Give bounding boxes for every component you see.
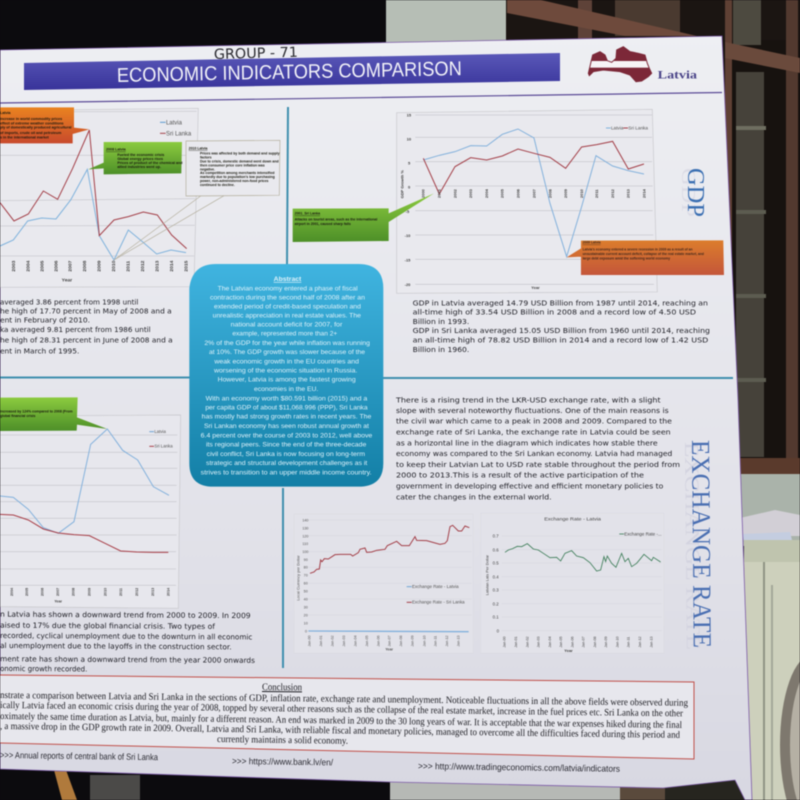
chart: exchange rate Latvia: Jan-06 — [570, 636, 574, 648]
panel: abstract: worsening of the economic situation in Russia. — [213, 368, 357, 375]
panel: abstract: 6.4 percent over the course of 2003 to 2012, well above — [201, 432, 373, 439]
chart: exchange rate Latvia vs Sri Lanka: 140 — [302, 518, 308, 522]
chart: exchange rate Latvia vs Sri Lanka: 20 — [304, 613, 308, 617]
chart: exchange rate Latvia vs Sri Lanka: Jan-03 — [342, 635, 346, 647]
exchange rate vertical heading: EXCHANGE RATE — [686, 440, 717, 648]
unemployment description text: n Latvia has shown a downward trend from 2000 to 2009. In 2009 — [0, 610, 251, 620]
panel: abstract: The Latvian economy entered a phase of fiscal — [218, 285, 358, 292]
unemployment line chart: 2013 — [151, 588, 155, 596]
callout: inflation 2010 note: negative. — [200, 167, 215, 171]
callout: inflation orange: ply of domestically produced agricultural — [0, 126, 72, 130]
GDP line chart: 2000 — [421, 188, 426, 198]
callout: inflation orange: Latvia — [0, 111, 12, 115]
inflation line chart: Latvia — [166, 120, 183, 126]
callout: GDP green 2001: Attacks on tourist areas, such as the international — [295, 217, 377, 221]
GDP line chart: Sri Lanka — [628, 125, 648, 130]
panel: abstract: Sri Lankan economy has seen robust annual growth at — [204, 423, 369, 430]
GDP line chart: 2014 — [641, 188, 646, 198]
exchange rate description text: economy was compared to the Sri Lankan economy. Latvia had managed — [396, 449, 672, 458]
GDP description text: all-time high of 33.54 USD Billion in 2008 and a record low of 4.50 USD — [413, 308, 696, 317]
panel: abstract: extended period of credit-based speculation and — [214, 303, 361, 310]
callout: inflation orange: effect of extreme weather conditions — [0, 121, 64, 125]
unemployment line chart: 2004 — [10, 587, 14, 596]
GDP line chart: -10 — [405, 233, 411, 238]
title banner: ECONOMIC INDICATORS COMPARISON — [117, 58, 462, 87]
chart: exchange rate Latvia vs Sri Lanka: Exchange Rate - Sri Lanka — [412, 600, 465, 605]
chart: exchange rate Latvia: 0.2 — [493, 601, 499, 606]
panel: conclusion: , a massive drop in the GDP growth rate in 2009. Overall, Latvia and Sri Lanka, with reliable fiscal and monetary policies, managed to overcome all the difficulties faced during this period and — [0, 721, 680, 741]
references: >>> https://www.bank.lv/en/ — [232, 756, 334, 767]
title banner — [24, 53, 560, 90]
inflation description text: he high of 28.31 percent in June of 2008 and a — [0, 335, 173, 344]
callout: inflation green 2008: 2008 Latvia — [106, 148, 127, 152]
GDP line chart: 2001 — [437, 188, 442, 198]
Latvia map logo — [587, 46, 698, 83]
unemployment description text: aised to 17% due the global financial crisis. Two types of — [0, 621, 215, 631]
inflation line chart: 2011 — [125, 261, 131, 272]
exchange rate description text: slope with several noteworthy fluctuations. One of the main reasons is — [396, 406, 669, 415]
GDP line chart: GDP Growth % — [399, 170, 404, 198]
callout: GDP green 2001 — [293, 193, 434, 242]
unemployment description text: onomic growth recorded. — [0, 664, 87, 674]
panel: conclusion: currently maintains a solid economy. — [217, 734, 348, 747]
chart: exchange rate Latvia: Jan-04 — [548, 636, 552, 648]
unemployment line chart: 2009 — [88, 588, 92, 596]
unemployment line chart: 2014 — [167, 587, 171, 596]
callout: inflation orange: increase in world commodity prices — [0, 117, 62, 121]
unemployment line chart: 2006 — [41, 588, 45, 596]
chart: exchange rate Latvia vs Sri Lanka — [294, 514, 473, 653]
inflation line chart: 2013 — [154, 260, 160, 272]
panel: abstract: contraction during the second half of 2008 after an — [210, 294, 365, 301]
GDP description text: Billion in 1993. — [413, 317, 469, 326]
panel: unemployment — [0, 397, 255, 674]
inflation description text: ent in March of 1995. — [0, 346, 79, 355]
chart: exchange rate Latvia: Jan-02 — [526, 636, 530, 648]
inflation line chart: 2004 — [25, 260, 31, 272]
chart: exchange rate Latvia vs Sri Lanka: Jan-09 — [410, 635, 414, 647]
panel: abstract: 2% of the GDP for the year while inflation was running — [204, 340, 370, 347]
chart: exchange rate Latvia: Jan-08 — [593, 636, 597, 648]
callout: inflation 2010 note: 2010 Latvia — [189, 146, 207, 150]
panel: abstract — [189, 264, 383, 487]
chart: exchange rate Latvia: Jan-11 — [627, 637, 631, 648]
GDP description text: GDP in Sri Lanka averaged 15.05 USD Billion from 1960 until 2014, reaching — [413, 326, 710, 335]
background: wall, papers and air conditioner — [738, 474, 800, 800]
GDP line chart: 2005 — [500, 188, 505, 198]
panel: abstract: per capita GDP of about $11,068.996 (PPP), Sri Lanka — [205, 405, 368, 412]
inflation line chart: 2012 — [140, 260, 146, 272]
exchange rate description text: cater the changes in the external world. — [396, 493, 552, 502]
chart: exchange rate Latvia: Exchange Rate - Latvia — [544, 516, 601, 522]
panel: conclusion: Conclusion — [262, 682, 302, 693]
callout: inflation 2010 note: As competition among merchants intensified — [200, 171, 275, 175]
GDP line chart: -15 — [405, 257, 411, 262]
chart: exchange rate Latvia vs Sri Lanka: 120 — [302, 534, 308, 538]
exchange rate description text: the civil war which came to a peak in 2008 and 2009. Compared to the — [396, 417, 672, 426]
exchange rate description text: government in developing effective and efficient monetary policies to — [396, 482, 664, 491]
inflation line chart: 2008 — [82, 260, 88, 272]
panel: abstract: weak economic growth in the EU countries and — [213, 358, 359, 365]
unemployment description text: recorded, cyclical unemployment due to the downturn in all economic — [0, 631, 252, 642]
chart: exchange rate Latvia vs Sri Lanka: Jan-13 — [457, 635, 461, 647]
panel: abstract: strives to transition to an upper middle income country. — [201, 469, 372, 476]
chart: exchange rate Latvia vs Sri Lanka: 100 — [302, 550, 308, 554]
callout: inflation orange: s in the international market — [0, 135, 50, 139]
unemployment line chart: Year — [54, 600, 63, 604]
GDP line chart: Year — [531, 285, 540, 290]
chart: exchange rate Latvia vs Sri Lanka: 90 — [304, 558, 308, 562]
GDP line chart: -20 — [405, 282, 411, 287]
chart: exchange rate Latvia vs Sri Lanka: 50 — [304, 590, 308, 594]
unemployment line chart: Sri Lanka — [154, 444, 173, 449]
chart: exchange rate Latvia vs Sri Lanka: Jan-05 — [365, 635, 369, 647]
chart: exchange rate Latvia: Jan-03 — [537, 636, 541, 648]
inflation line chart — [0, 108, 198, 287]
panel: abstract: Abstract — [274, 276, 302, 283]
unemployment line chart: 2012 — [135, 588, 139, 596]
callout: GDP orange 2009: 2009 Latvia — [583, 241, 601, 245]
chart: exchange rate Latvia: Latvian Lats Per Dollar — [484, 554, 489, 595]
background: lower room — [54, 770, 745, 800]
chart: exchange rate Latvia: Jan-10 — [615, 636, 619, 648]
callout: inflation 2010 note: Due to crisis, domestic demand went down and — [200, 159, 279, 163]
Latvia map logo: Latvia — [658, 70, 697, 82]
callout: inflation green 2008: Prices of product of the chemical and — [117, 161, 183, 165]
callout: GDP green 2001: 2001_Sri Lanka — [295, 212, 320, 216]
callout: inflation 2010 note: factors — [200, 155, 212, 159]
chart: exchange rate Latvia vs Sri Lanka: 130 — [302, 526, 308, 530]
callout: inflation green 2008: allied industries went up. — [117, 165, 161, 169]
GDP line chart — [397, 109, 657, 293]
panel: conclusion: ically Latvia faced an economic crisis during the year of 2008, topped by several other reasons such as the collapse of the real estate market, increase in the fuel prices etc. Sri Lanka on the other — [0, 700, 684, 719]
chart: exchange rate Latvia vs Sri Lanka: 0 — [305, 629, 307, 633]
chart: exchange rate Latvia vs Sri Lanka: 110 — [302, 542, 308, 546]
GDP line chart: -5 — [406, 209, 410, 214]
section dividers — [0, 107, 733, 668]
GDP line chart: 5 — [408, 160, 411, 165]
GDP line chart: 2002 — [452, 188, 457, 198]
panel: abstract: at 10%. The GDP growth was slower because of the — [209, 349, 365, 356]
inflation line chart: 2009 — [97, 260, 103, 272]
panel: conclusion: oximately the same time duration as Latvia, but, mainly for a different reason. An end was marked in 2009 to the 30 long years of war. It is acceptable that the war expenses hiked during the final — [0, 711, 682, 731]
chart: exchange rate Latvia: Exchange Rate -... — [624, 531, 662, 536]
GDP line chart: 2007 — [531, 188, 536, 198]
inflation description text: he high of 17.70 percent in May of 2008 and a — [0, 306, 172, 315]
callout: GDP green 2001: airport in 2001, caused sharp falls — [295, 222, 351, 226]
background: wooden window frames — [506, 0, 800, 474]
chart: exchange rate Latvia: Jan-01 — [514, 636, 518, 648]
exchange rate description text: as a horizontal line in the diagram which indicates how stable there — [396, 438, 658, 447]
exchange rate vertical heading: EXCHANGE RATE — [680, 442, 704, 650]
callout: inflation 2010 note: then consumer price core inflation was — [200, 163, 265, 167]
chart: exchange rate Latvia vs Sri Lanka: 60 — [304, 582, 308, 586]
panel: conclusion — [0, 675, 694, 759]
callout: inflation 2010 note: markedly due to population's low purchasing — [200, 175, 275, 179]
panel: GDP — [293, 109, 724, 354]
inflation line chart: Sri Lanka — [166, 131, 192, 137]
callout: inflation orange — [0, 107, 89, 143]
chart: exchange rate Latvia vs Sri Lanka: 80 — [304, 566, 308, 570]
chart: exchange rate Latvia vs Sri Lanka: Jan-10 — [422, 635, 426, 647]
callout: GDP orange 2009 — [567, 240, 724, 275]
GDP line chart: 2013 — [626, 188, 631, 198]
exchange rate description text: There is a rising trend in the LKR-USD exchange rate, with a slight — [395, 395, 661, 404]
inflation line chart: 2010 — [111, 260, 117, 272]
references: >>> http://www.tradingeconomics.com/latvia/indicators — [418, 761, 621, 774]
chart: exchange rate Latvia vs Sri Lanka: 70 — [304, 574, 308, 578]
GDP line chart: 0 — [408, 185, 411, 190]
exchange rate description text — [395, 395, 680, 502]
chart: exchange rate Latvia: Jan-05 — [559, 636, 563, 648]
GDP vertical heading: GDP — [677, 168, 699, 217]
callout: inflation green 2008: Fueled the economic crisis — [117, 153, 164, 157]
chart: exchange rate Latvia: 0.6 — [493, 547, 499, 552]
panel: abstract: national account deficit for 2007, for — [231, 322, 343, 329]
callout: inflation 2010 note: continued to decline. — [200, 183, 235, 187]
inflation line chart: 2015 — [184, 260, 190, 272]
unemployment line chart: 2011 — [119, 588, 123, 596]
exchange rate description text: to keep their Latvian Lat to USD rate stable throughout the period from — [396, 460, 680, 469]
chart: exchange rate Latvia vs Sri Lanka: Jan-12 — [445, 635, 449, 647]
chart: exchange rate Latvia: 0.1 — [493, 615, 499, 620]
inflation line chart: 2007 — [68, 260, 74, 272]
GDP description text: an all-time high of 78.82 USD Billion in 2014 and a record low of 1.42 USD — [413, 336, 709, 345]
references: >>> Annual reports of central bank of Sri Lanka — [0, 750, 158, 762]
GDP line chart: 2009 — [563, 188, 568, 198]
chart: exchange rate Latvia: Jan-13 — [649, 636, 653, 648]
GDP line chart: 2004 — [484, 188, 489, 198]
chart: exchange rate Latvia vs Sri Lanka: Jan-04 — [353, 635, 357, 647]
references — [0, 750, 621, 774]
chart: exchange rate Latvia vs Sri Lanka: 10 — [304, 621, 308, 625]
callout: GDP orange 2009: large debt exposure amid the softening world economy — [583, 257, 670, 261]
unemployment description text — [0, 610, 255, 674]
GDP line chart: 15 — [407, 113, 412, 118]
chart: exchange rate Latvia vs Sri Lanka: Jan-02 — [331, 635, 335, 647]
GDP line chart: 2006 — [515, 188, 520, 198]
chart: exchange rate Latvia vs Sri Lanka: Jan-06 — [376, 635, 380, 647]
callout: inflation orange: of imports, crude oil and petroleum — [0, 131, 62, 135]
panel: abstract: With an economy worth $80.591 billion (2015) and a — [206, 395, 368, 402]
callout: inflation 2010 note: power, non-administered non-food prices — [200, 179, 269, 183]
callout: unemployment green: global financial crisis — [0, 414, 35, 418]
GDP vertical heading: GDP — [682, 168, 708, 217]
unemployment description text: ment rate has shown a downward trend from the year 2000 onwards — [0, 654, 255, 665]
panel: abstract: has mostly had strong growth rates in recent years. The — [202, 414, 372, 421]
chart: exchange rate Latvia: 0.5 — [493, 561, 499, 566]
unemployment line chart: 2010 — [103, 588, 107, 596]
chart: exchange rate Latvia vs Sri Lanka: Exchange Rate - Latvia — [412, 584, 459, 589]
chart: exchange rate Latvia: Year — [564, 648, 573, 653]
chart: exchange rate Latvia vs Sri Lanka: Jan-07 — [388, 635, 392, 647]
chart: exchange rate Latvia vs Sri Lanka: Jan-01 — [319, 635, 323, 647]
inflation line chart: Year — [62, 278, 72, 284]
chart: exchange rate Latvia vs Sri Lanka: Year — [385, 647, 394, 651]
panel: abstract: civil conflict, Sri Lanka is now focusing on long-term — [207, 451, 365, 458]
callout: unemployment green: increased by 124% compared to 2008 (From — [0, 409, 73, 413]
panel: abstract: example, represented more than 2+ — [232, 331, 337, 338]
panel: exchange rate charts — [294, 513, 664, 653]
handwritten group label: GROUP - 71 — [214, 45, 298, 63]
inflation line chart: 2003 — [11, 260, 17, 272]
GDP line chart: 2012 — [610, 188, 615, 198]
callout: inflation 2010 note — [114, 140, 280, 260]
callout: GDP orange 2009: unsustainable current account deficit, collapse of the real estate market, and — [583, 252, 704, 256]
callout: inflation green 2008 — [88, 142, 183, 174]
chart: exchange rate Latvia vs Sri Lanka: Jan-11 — [434, 636, 438, 647]
GDP line chart: 10 — [407, 137, 412, 142]
chart: exchange rate Latvia: Jan-07 — [582, 636, 586, 648]
panel: abstract: However, Latvia is among the fastest growing — [218, 377, 356, 384]
chart: exchange rate Latvia: Jan-00 — [503, 636, 507, 648]
chart: exchange rate Latvia: 0.7 — [493, 534, 499, 539]
GDP line chart: 2003 — [468, 188, 473, 198]
inflation description text — [0, 297, 173, 355]
chart: exchange rate Latvia vs Sri Lanka: Jan-08 — [399, 635, 403, 647]
GDP line chart: 2011 — [594, 189, 599, 198]
inflation line chart: 2006 — [53, 260, 59, 272]
chart: exchange rate Latvia vs Sri Lanka: Jan-00 — [308, 635, 312, 647]
panel: conclusion: nstrate a comparison between Latvia and Sri Lanka in the sections of GDP, inflation rate, exchange rate and unemployment. Noticeable fluctuations in all the above fields were observed during — [0, 690, 688, 709]
panel: abstract: its regional peers. Since the end of the three-decade — [206, 442, 367, 449]
chart: exchange rate Latvia: 0.3 — [493, 588, 499, 593]
GDP line chart: 2010 — [579, 188, 584, 198]
inflation description text: averaged 3.86 percent from 1998 until — [0, 297, 138, 306]
callout: unemployment green — [0, 397, 107, 431]
panel: abstract: economies in the EU. — [254, 386, 318, 393]
callout: inflation 2010 note: Prices was affected by both demand and supply — [200, 151, 280, 155]
unemployment line chart: Latvia — [154, 429, 166, 434]
chart: exchange rate Latvia vs Sri Lanka: 40 — [304, 598, 308, 602]
background: pillar — [386, 0, 506, 45]
unemployment line chart: 2008 — [72, 588, 76, 596]
GDP line chart: 2008 — [547, 188, 552, 198]
panel: abstract: unrealistic appreciation in real estate values. The — [213, 312, 361, 319]
panel: abstract: strategic and structural development challenges as it — [206, 460, 367, 467]
GDP description text: GDP in Latvia averaged 14.79 USD Billion from 1987 until 2014, reaching an — [413, 298, 708, 307]
header divider — [0, 92, 722, 103]
GDP description text — [413, 298, 710, 354]
unemployment line chart: 2007 — [56, 588, 60, 596]
GDP description text: Billion in 1960. — [413, 345, 469, 354]
chart: exchange rate Latvia vs Sri Lanka: Local Currency per Dollar — [296, 555, 301, 601]
unemployment line chart — [0, 415, 181, 608]
chart: exchange rate Latvia: 0.4 — [493, 574, 499, 579]
chart: exchange rate Latvia: Jan-09 — [604, 636, 608, 648]
exchange rate description text: 2000 to 2013.This is a result of the active participation of the — [396, 471, 644, 480]
panel: inflation — [0, 107, 280, 355]
exchange rate description text: exchange rate of Sri Lanka, the exchange rate in Latvia could be seen — [396, 427, 671, 436]
inflation description text: ka averaged 9.81 percent from 1986 until — [0, 325, 151, 334]
chart: exchange rate Latvia — [481, 513, 664, 653]
inflation description text: ent in February of 2010. — [0, 316, 90, 325]
chart: exchange rate Latvia: 0 — [497, 628, 500, 633]
callout: GDP orange 2009: Latvia's economy entered a severe recession in 2009 as a result of an — [583, 248, 693, 252]
unemployment description text: al unemployment due to the layoffs in the construction sector. — [0, 641, 232, 651]
chart: exchange rate Latvia vs Sri Lanka: 30 — [304, 605, 308, 609]
inflation line chart: 2005 — [39, 260, 45, 272]
chart: exchange rate Latvia: Jan-12 — [638, 636, 642, 648]
GDP line chart: Latvia — [611, 125, 624, 130]
inflation line chart: 2014 — [169, 260, 175, 272]
callout: inflation green 2008: Global energy prices rises — [117, 157, 163, 161]
unemployment line chart: 2005 — [25, 588, 29, 596]
